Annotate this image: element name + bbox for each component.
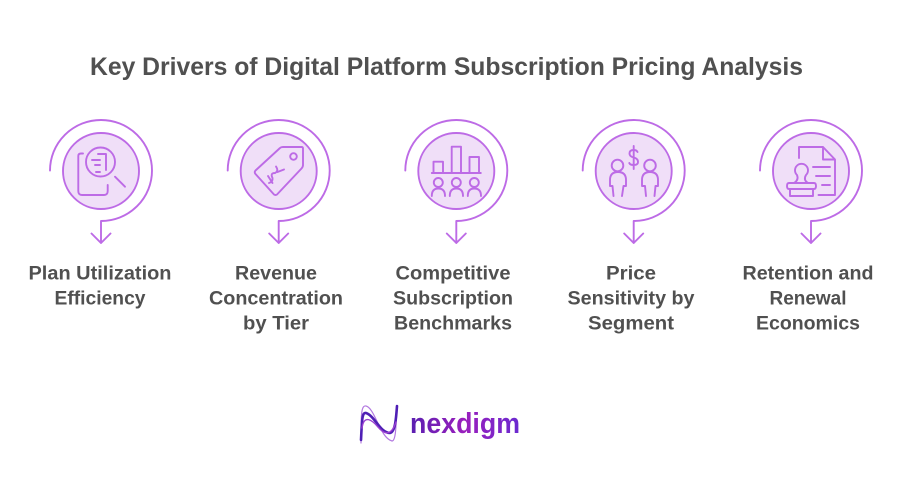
title: Key Drivers of Digital Platform Subscription Pricing Analysis	[90, 53, 803, 81]
icon: document magnifier	[63, 133, 139, 209]
label: Concentration	[209, 288, 343, 310]
spiral arrow 2	[228, 120, 330, 243]
label: Retention and	[742, 262, 874, 284]
label	[742, 262, 874, 334]
label	[28, 262, 172, 310]
label: Renewal	[770, 288, 846, 310]
label	[393, 262, 513, 334]
driver 4: price sensitivity by segment	[568, 120, 695, 334]
label: Plan Utilization	[28, 262, 172, 284]
label: Economics	[756, 312, 860, 334]
driver 2: revenue concentration by tier	[209, 120, 343, 334]
label: Price	[606, 262, 656, 284]
driver 3: competitive subscription benchmarks	[393, 120, 513, 334]
spiral arrow 1	[50, 120, 152, 243]
icon: people with dollar sign	[596, 133, 672, 209]
label: Revenue	[235, 262, 317, 284]
icon: bar chart and people	[418, 133, 494, 209]
logo wordmark: nexdigm	[410, 408, 520, 440]
icon: stamp and document	[773, 133, 849, 209]
logo mark	[361, 406, 397, 443]
driver 5: retention and renewal economics	[742, 120, 874, 334]
label: by Tier	[243, 312, 309, 334]
logo: nexdigm	[361, 406, 520, 443]
driver 1: plan utilization efficiency	[28, 120, 172, 310]
label: Subscription	[393, 288, 513, 310]
spiral arrow 3	[405, 120, 507, 243]
spiral arrow 5	[760, 120, 862, 243]
label: Sensitivity by	[568, 288, 695, 310]
label: Benchmarks	[394, 312, 512, 334]
label	[209, 262, 343, 334]
label	[568, 262, 695, 334]
label: Efficiency	[54, 288, 146, 310]
icon: price tag	[241, 133, 317, 209]
label: Segment	[588, 312, 675, 334]
label: Competitive	[396, 262, 511, 284]
spiral arrow 4	[583, 120, 685, 243]
